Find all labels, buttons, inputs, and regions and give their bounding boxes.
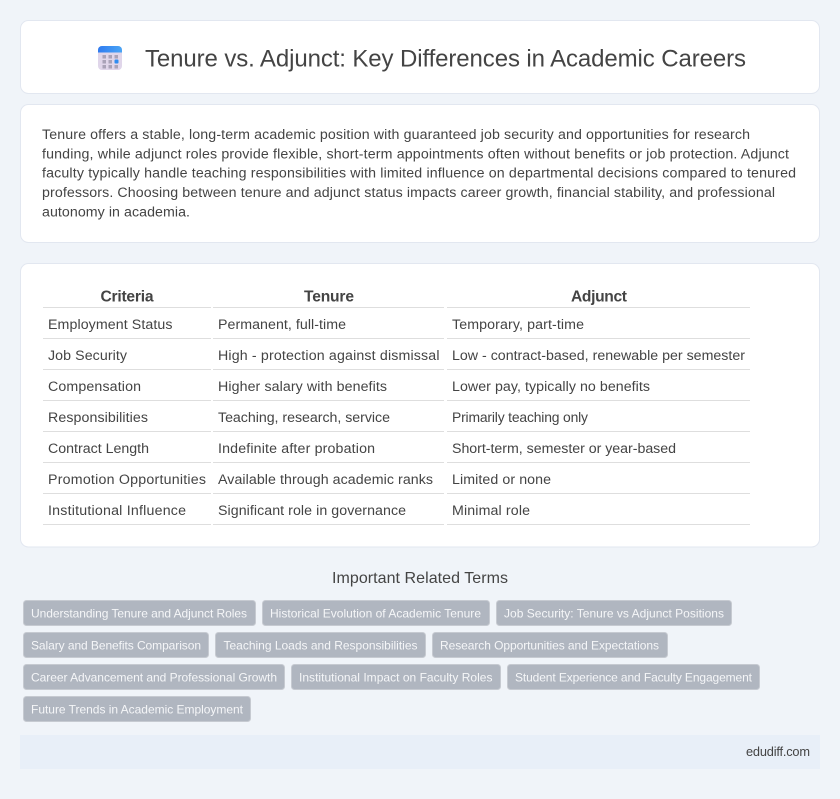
row: job security [48,348,745,364]
table header: Tenure [304,289,354,306]
row: institutional influence [48,503,530,519]
tag: Teaching Loads and Responsibilities [224,638,418,652]
tag: Career Advancement and Professional Growth [31,670,277,684]
panel: header [20,20,820,94]
row: institutional influence: Institutional Influence [48,503,186,519]
title: Tenure vs. Adjunct: Key Differences in Academic Careers [145,46,746,72]
row: job security: Low - contract-based, renewable per semester [452,348,745,364]
tag: Historical Evolution of Academic Tenure [270,606,481,620]
tag [24,600,256,626]
tag [432,632,668,658]
tag [24,664,284,690]
row: compensation: Lower pay, typically no benefits [452,379,650,395]
tag [262,600,490,626]
row: promotion opportunities: Available through academic ranks [218,472,433,488]
row: contract length [48,441,676,457]
tag [24,696,250,722]
row: job security: High - protection against dismissal [218,348,440,364]
row: institutional influence: Minimal role [452,503,530,519]
row: promotion opportunities [48,472,551,488]
row: employment status: Employment Status [48,317,172,333]
icon: calendar [98,46,122,70]
related terms tags [24,600,760,722]
tag [24,632,208,658]
tag [496,600,732,626]
footer source: edudiff.com [746,744,810,759]
summary text [42,127,796,220]
row: employment status [48,317,584,333]
tag: Job Security: Tenure vs Adjunct Positions [504,606,724,620]
row: compensation [48,379,650,395]
row: institutional influence: Significant role in governance [218,503,406,519]
tag: Salary and Benefits Comparison [31,638,201,652]
row: responsibilities: Primarily teaching only [452,409,588,425]
row: employment status: Permanent, full-time [218,317,346,333]
row: responsibilities [48,409,588,426]
row: compensation: Higher salary with benefits [218,379,387,395]
row: compensation: Compensation [48,379,141,395]
row: responsibilities: Teaching, research, service [218,410,390,426]
tag: Understanding Tenure and Adjunct Roles [31,606,247,620]
summary text: faculty typically handle teaching responsibilities with limited influence on departmental decisions compared to tenured [42,166,796,182]
panel: comparison table [20,264,820,547]
tag: Student Experience and Faculty Engagement [515,670,753,684]
row: promotion opportunities: Limited or none [452,472,551,488]
row: responsibilities: Responsibilities [48,410,148,426]
tag [292,664,500,690]
table header: Criteria [100,289,154,306]
summary text: Tenure offers a stable, long-term academic position with guaranteed job security and opportunities for research [42,127,750,143]
tag [508,664,760,690]
related terms heading: Important Related Terms [332,570,508,587]
row: contract length: Short-term, semester or year-based [452,441,676,457]
panel: summary [20,104,820,242]
tag: Future Trends in Academic Employment [31,702,244,716]
footer [20,735,820,769]
tag: Institutional Impact on Faculty Roles [299,670,492,684]
summary text: professors. Choosing between tenure and adjunct status impacts career growth, financial stability, and professional [42,185,775,201]
row: contract length: Indefinite after probation [218,441,375,457]
row: job security: Job Security [48,348,128,364]
row: promotion opportunities: Promotion Opportunities [48,472,206,488]
row: employment status: Temporary, part-time [452,317,584,333]
tag: Research Opportunities and Expectations [440,638,659,652]
tag [216,632,426,658]
row: contract length: Contract Length [48,441,149,457]
summary text: autonomy in academia. [42,204,190,220]
table header [100,289,627,306]
summary text: funding, while adjunct roles provide flexible, short-term appointments often without benefits or job protection. Adjunct [42,146,789,162]
table header: Adjunct [571,289,627,306]
